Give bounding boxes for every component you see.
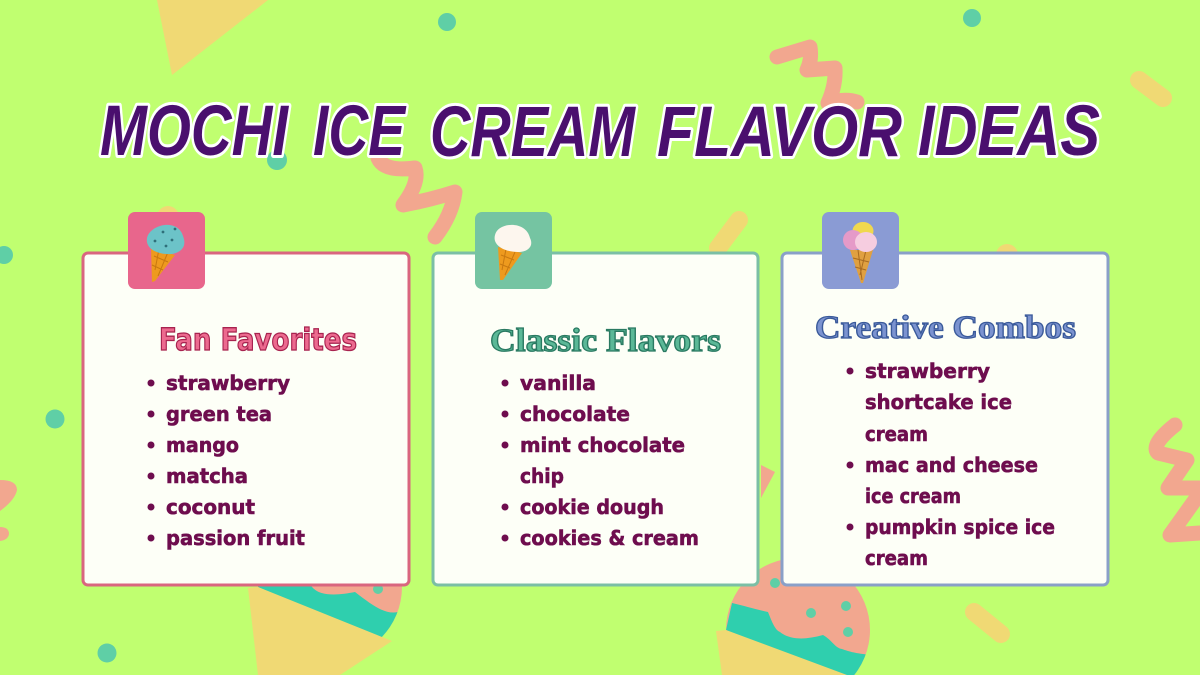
list: creative combos: ice cream — [865, 484, 961, 508]
panel: classic flavors — [433, 212, 758, 585]
list: classic flavors: cookie dough — [520, 495, 664, 519]
list: fan favorites: strawberry — [166, 371, 290, 395]
list: creative combos: strawberry — [865, 359, 990, 383]
list: fan favorites: passion fruit — [166, 526, 305, 550]
list: creative combos: cream — [865, 422, 928, 446]
list: creative combos: shortcake ice — [865, 390, 1012, 414]
list: classic flavors: chocolate — [520, 402, 630, 426]
list: fan favorites: mango — [166, 433, 239, 457]
list: creative combos: mac and cheese — [865, 453, 1038, 477]
panel: fan favorites — [83, 212, 409, 585]
list: classic flavors: cookies & cream — [520, 526, 699, 550]
list: fan favorites: matcha — [166, 464, 248, 488]
panel: creative combos — [782, 212, 1108, 585]
icon: vanilla ice cream cone — [475, 212, 552, 289]
list: classic flavors: chip — [520, 464, 564, 488]
title: IDEAS — [918, 92, 1100, 171]
background ice cream: right — [716, 558, 875, 675]
heading: fan favorites: Fan Favorites — [159, 323, 357, 358]
list: fan favorites: coconut — [166, 495, 255, 519]
heading: classic flavors: Classic Flavors — [490, 323, 721, 359]
list: classic flavors: mint chocolate — [520, 433, 685, 457]
list: creative combos — [846, 359, 1055, 570]
title — [100, 92, 1100, 172]
list: fan favorites — [148, 371, 305, 550]
title: MOCHI — [100, 92, 289, 171]
list: classic flavors — [502, 371, 699, 550]
title: ICE — [313, 92, 407, 171]
icon: mint chip ice cream cone — [128, 212, 205, 289]
list: creative combos: pumpkin spice ice — [865, 515, 1055, 539]
heading: creative combos: Creative Combos — [815, 310, 1076, 346]
background ice cream: left — [248, 586, 402, 675]
title: FLAVOR — [657, 93, 902, 172]
list: fan favorites: green tea — [166, 402, 272, 426]
icon: triple scoop ice cream cone — [822, 212, 899, 289]
title: CREAM — [430, 93, 636, 172]
list: classic flavors: vanilla — [520, 371, 596, 395]
list: creative combos: cream — [865, 546, 928, 570]
